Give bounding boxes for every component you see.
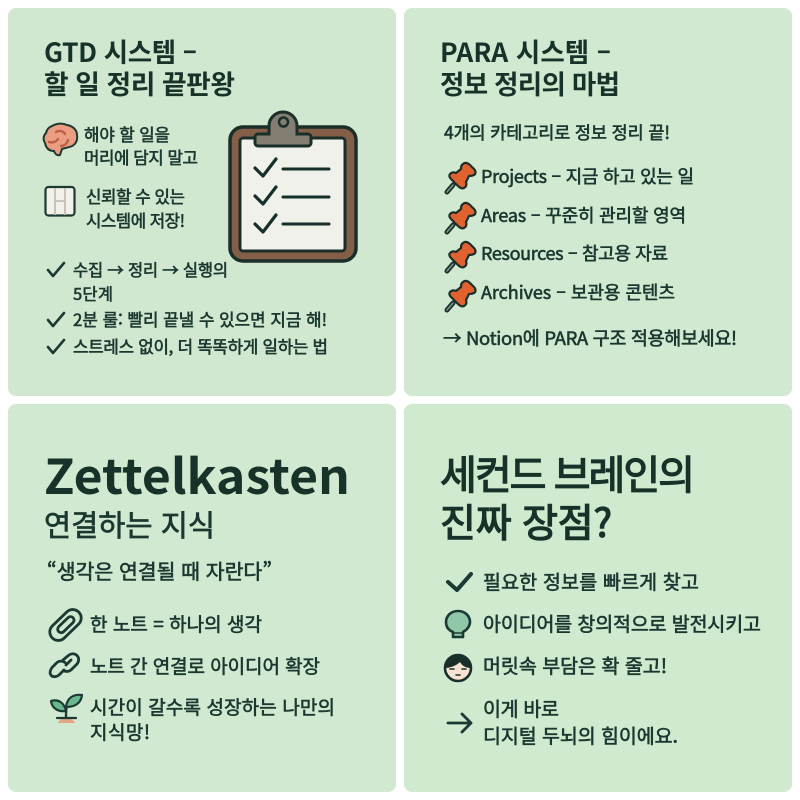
heading: PARA: 정보 정리의 마법 — [440, 63, 620, 102]
item: links: 노트 간 연결로 아이디어 확장 — [90, 652, 320, 679]
item: growing network: 지식망! — [90, 718, 150, 745]
heading: GTD: GTD 시스템 – — [44, 31, 197, 70]
item: digital brain power: 디지털 두뇌의 힘이에요. — [483, 720, 678, 749]
item: areas: Areas – 꾸준히 관리할 영역 — [481, 202, 686, 228]
item: ideas: 아이디어를 창의적으로 발전시키고 — [483, 608, 761, 637]
panel: Zettelkasten — [8, 404, 396, 792]
item: no stress: 스트레스 없이, 더 똑똑하게 일하는 법 — [73, 334, 328, 358]
subheading: 연결하는 지식 — [44, 503, 215, 545]
panel: GTD — [8, 8, 396, 396]
item: digital brain power — [448, 693, 678, 749]
item: one note — [46, 606, 262, 644]
icon: storage box — [46, 187, 74, 216]
item: find fast: 필요한 정보를 빠르게 찾고 — [483, 566, 699, 595]
item: five steps: 수집 → 정리 → 실행의 — [73, 257, 228, 281]
icon: brain — [44, 124, 77, 155]
panel: second brain benefits — [404, 404, 792, 792]
item: resources: Resources – 참고용 자료 — [481, 240, 668, 266]
list: GTD points — [48, 257, 328, 358]
text: four categories: 4개의 카테고리로 정보 정리 끝! — [444, 120, 670, 145]
icon: clipboard — [230, 112, 356, 261]
text: trusted system: 신뢰할 수 있는 — [86, 184, 185, 208]
text: do not keep in head: 머리에 담지 말고 — [84, 145, 198, 169]
item: five steps — [48, 257, 228, 305]
heading: Zettelkasten: Zettelkasten — [44, 438, 350, 508]
item: less burden: 머릿속 부담은 확 줄고! — [483, 650, 667, 679]
text: trusted system: 시스템에 저장! — [86, 208, 185, 232]
heading: benefits: 진짜 장점? — [440, 493, 612, 549]
item: growing network — [51, 693, 335, 745]
item: five steps: 5단계 — [73, 281, 113, 305]
heading: GTD — [44, 31, 235, 102]
panel: PARA — [404, 8, 792, 396]
text: do not keep in head — [84, 122, 198, 169]
heading: GTD: 할 일 정리 끝판왕 — [44, 63, 235, 102]
item: two minute rule: 2분 룰: 빨리 끝낼 수 있으면 지금 해! — [73, 307, 327, 331]
item: projects: Projects – 지금 하고 있는 일 — [481, 163, 694, 189]
item: growing network: 시간이 갈수록 성장하는 나만의 — [90, 693, 335, 720]
item: archives: Archives – 보관용 콘텐츠 — [481, 279, 675, 305]
heading: PARA: PARA 시스템 – — [440, 31, 611, 70]
text: trusted system — [86, 184, 185, 232]
heading: benefits: 세컨드 브레인의 — [440, 443, 695, 501]
text: do not keep in head: 해야 할 일을 — [84, 122, 170, 146]
item: digital brain power: 이게 바로 — [483, 693, 559, 722]
quote: “생각은 연결될 때 자란다” — [47, 555, 272, 585]
callout: apply in Notion: → Notion에 PARA 구조 적용해보세요! — [443, 325, 737, 351]
item: one note: 한 노트 = 하나의 생각 — [90, 610, 262, 637]
heading: benefits — [440, 443, 695, 549]
heading: PARA — [440, 31, 620, 102]
